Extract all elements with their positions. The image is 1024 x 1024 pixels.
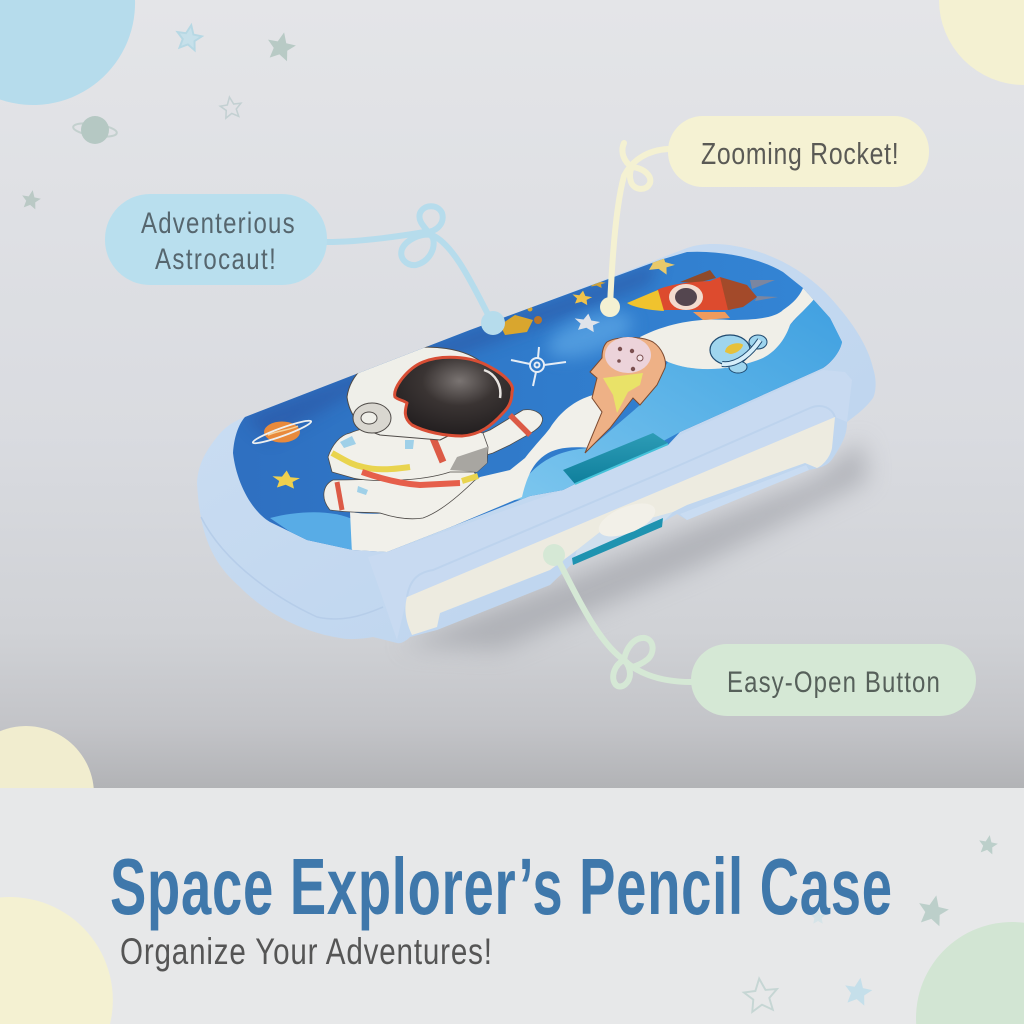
rocket	[627, 270, 778, 320]
front rim ledge	[407, 406, 835, 597]
arm	[482, 409, 543, 455]
title: Space Explorer’s Pencil Case	[110, 843, 892, 932]
callout: button: Easy-Open Button	[727, 664, 940, 699]
decorative circle: bottom right green	[916, 922, 1024, 1024]
right blue foot	[680, 465, 809, 520]
blue button	[563, 433, 668, 484]
icon: faint star	[810, 909, 826, 924]
connector: rocket	[600, 143, 668, 317]
icon: outline star	[219, 96, 243, 119]
art sky	[233, 252, 842, 552]
icon: blue star	[175, 23, 203, 51]
satellite	[511, 347, 566, 386]
legs	[323, 472, 476, 520]
front rim	[368, 370, 852, 640]
dot: button target	[543, 544, 565, 566]
panel stars	[743, 834, 999, 1013]
astronaut	[324, 347, 543, 519]
helmet	[346, 346, 482, 440]
decorative circle: bottom left yellow	[0, 897, 113, 1024]
planet	[252, 420, 312, 444]
connector: button	[543, 544, 691, 687]
comet	[585, 337, 665, 453]
icon: sage star	[264, 29, 298, 62]
yellow belt	[332, 453, 410, 469]
lower white band	[350, 395, 602, 554]
subtitle: Organize Your Adventures!	[120, 932, 492, 973]
callout: astronaut	[105, 194, 327, 285]
leg stripe	[337, 482, 342, 510]
red chest strip	[433, 438, 443, 462]
left end seam	[201, 517, 383, 619]
pencil case	[197, 240, 876, 643]
visor highlight	[484, 370, 500, 398]
visor	[395, 357, 513, 436]
torso	[328, 425, 488, 480]
icon: blue star	[842, 975, 874, 1007]
callout: astronaut: Adventerious	[141, 205, 295, 240]
light blue wave	[515, 298, 850, 500]
case body	[197, 244, 876, 643]
bottom panel	[0, 788, 1024, 1024]
ufo	[710, 335, 767, 373]
callout: astronaut: Astrocaut!	[155, 241, 276, 276]
latch bump	[594, 497, 660, 543]
background stars and planet	[20, 23, 298, 210]
lower left blue	[270, 512, 354, 552]
cream latch	[405, 417, 835, 635]
yellow belt end	[462, 476, 478, 481]
arm stripe	[510, 415, 530, 435]
red belt	[362, 472, 460, 485]
ear disc	[353, 403, 391, 433]
icon: sage star	[915, 892, 951, 927]
callout: button	[691, 644, 976, 716]
dot: astronaut target	[481, 311, 505, 335]
latch gap	[573, 512, 673, 563]
callout: rocket	[668, 116, 929, 187]
decorative circle: top right yellow	[939, 0, 1024, 85]
connector: astronaut	[327, 206, 505, 335]
yellow star	[272, 470, 300, 489]
case shadow	[400, 440, 868, 650]
icon: small sage star	[977, 834, 999, 855]
dark shading along top	[245, 260, 660, 440]
upper white swoosh	[640, 288, 815, 369]
photo background	[0, 0, 1024, 788]
callout: rocket: Zooming Rocket!	[701, 136, 899, 171]
icon: small sage star	[20, 189, 42, 210]
sky glow	[545, 308, 635, 362]
backpack	[450, 447, 487, 472]
icon: outline star	[743, 977, 779, 1013]
suit patches	[340, 436, 414, 495]
gold star	[649, 258, 675, 274]
gold star cluster	[572, 282, 606, 306]
decorative circle: lower left yellow	[0, 726, 94, 788]
dot: rocket target	[600, 297, 620, 317]
white star	[574, 314, 600, 332]
gold asteroid	[500, 306, 542, 335]
decorative circle: top left blue	[0, 0, 135, 105]
lid artwork	[233, 252, 842, 552]
latch slot metallic	[572, 518, 663, 565]
icon: ringed planet	[72, 116, 118, 144]
